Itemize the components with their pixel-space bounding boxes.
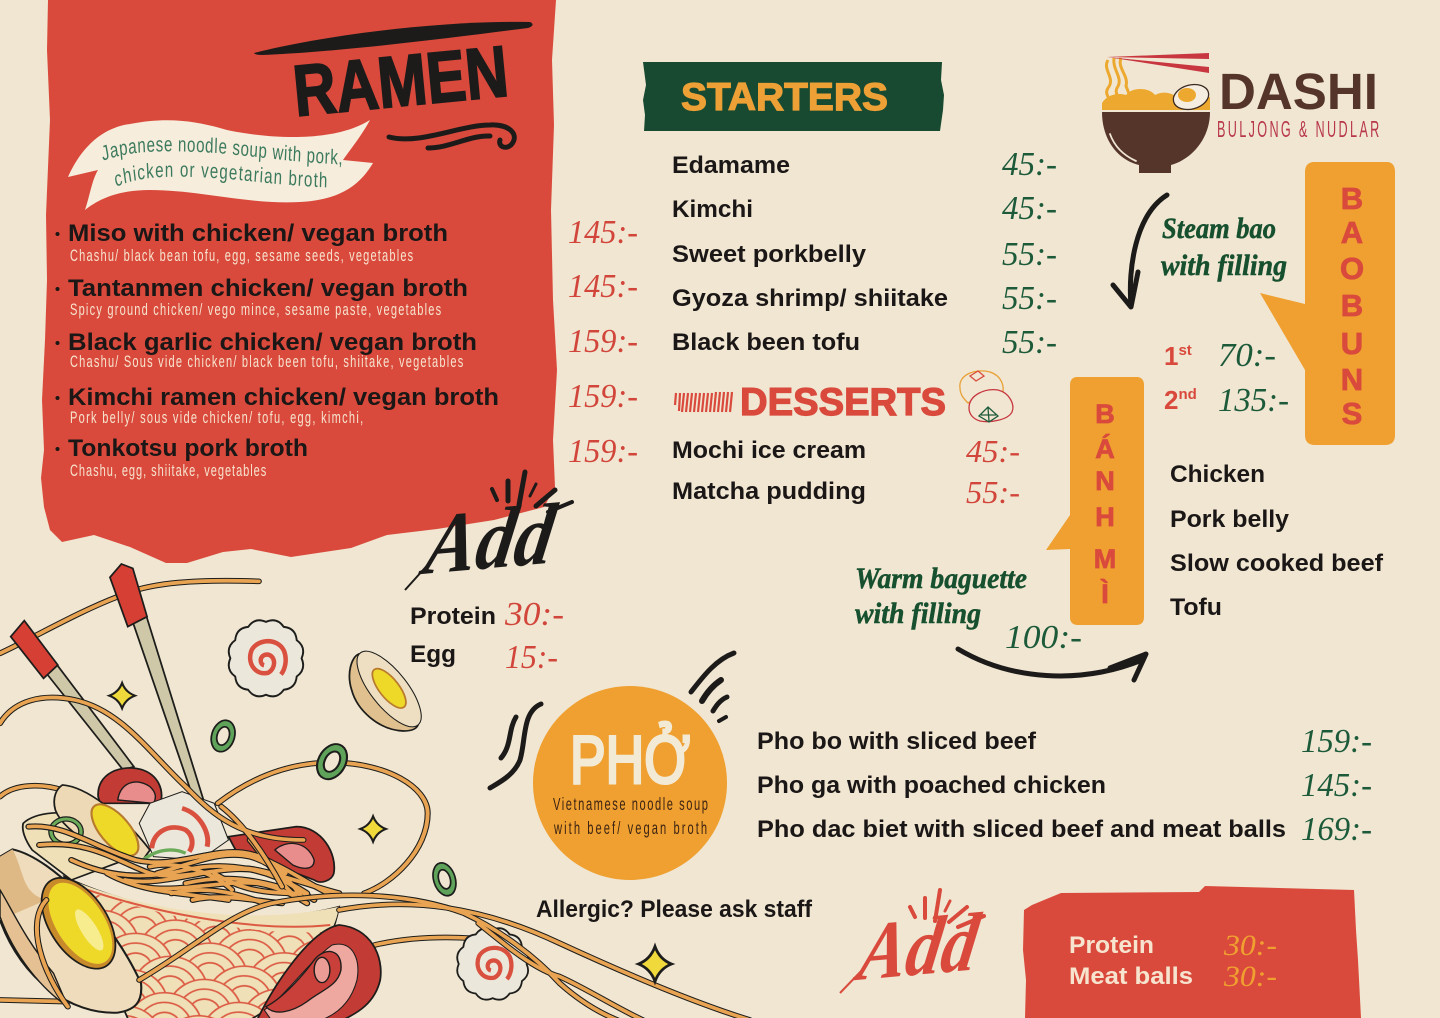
callout: banh mi: M <box>1094 544 1116 574</box>
list: desserts: Mochi ice cream <box>672 437 866 464</box>
list: fillings: Tofu <box>1170 594 1222 621</box>
prices: starters: 55:- <box>1002 324 1057 361</box>
badge: pho: PHỞ <box>570 721 690 798</box>
heading: starters <box>643 62 944 131</box>
list: pho: Pho dac biet with sliced beef and meat balls <box>757 816 1286 843</box>
callout: banh mi: H <box>1095 502 1115 532</box>
panel: pho extras <box>1023 886 1361 1018</box>
prices: ramen <box>568 214 638 470</box>
prices: ramen: 159:- <box>568 323 638 360</box>
list: starters: Gyoza shrimp/ shiitake <box>672 285 948 312</box>
badge: pho: with beef/ vegan broth <box>553 818 707 839</box>
prices: starters: 55:- <box>1002 280 1057 317</box>
callout: bao buns: S <box>1342 396 1362 431</box>
panel: pho extras: 30:- <box>1223 960 1277 993</box>
banner: ramen description: Japanese noodle soup with pork, <box>102 138 342 168</box>
list: starters: Black been tofu <box>672 329 860 356</box>
naruto in bowl <box>139 792 228 860</box>
heading: add (red): Add <box>849 896 986 999</box>
panel: pho extras: Protein <box>1069 932 1154 959</box>
list: ramen items: Chashu/ Sous vide chicken/ black been tofu, shiitake, vegetables <box>70 353 463 372</box>
list: ramen extras <box>410 596 564 676</box>
callout: banh mi <box>1046 377 1144 625</box>
panel: ramen red brush background <box>41 0 557 563</box>
list: ramen extras: 30:- <box>504 596 564 633</box>
green onion rings <box>208 718 460 898</box>
prices: ramen: 159:- <box>568 433 638 470</box>
panel: pho extras: Meat balls <box>1069 963 1193 990</box>
callout: bao buns: B <box>1341 288 1363 323</box>
small egg <box>348 650 422 732</box>
badge: pho <box>533 686 727 880</box>
prices: bao buns <box>1164 337 1289 419</box>
prices: starters: 45:- <box>1002 146 1057 183</box>
list: desserts <box>672 433 1020 510</box>
callout: bao buns: U <box>1341 326 1363 361</box>
list: pho: 145:- <box>1301 767 1372 804</box>
bowl rim back <box>22 812 127 880</box>
callout: banh mi: Á <box>1095 433 1115 464</box>
note: warm baguette <box>855 562 1027 630</box>
prices: bao buns: nd <box>1178 386 1197 403</box>
prices: bao buns: 135:- <box>1218 382 1289 419</box>
logo: dashi <box>1102 53 1379 173</box>
list: pho: Pho bo with sliced beef <box>757 728 1037 755</box>
prices: bao buns: 2 <box>1164 385 1178 415</box>
note: warm baguette: with filling <box>855 597 981 630</box>
list: pho <box>757 723 1372 848</box>
list: starters: Edamame <box>672 152 790 179</box>
long noodles running right <box>139 895 750 1018</box>
list: starters: Sweet porkbelly <box>672 241 867 268</box>
list: desserts: 55:- <box>966 474 1020 510</box>
meat slice top <box>98 768 162 803</box>
meat slice right <box>228 827 334 882</box>
heading: desserts: DESSERTS <box>740 381 946 424</box>
list: fillings: Slow cooked beef <box>1170 550 1384 577</box>
banner: ramen description: chicken or vegetarian broth <box>115 163 326 188</box>
yellow stars <box>109 683 386 842</box>
egg in bowl <box>54 785 150 863</box>
list: pho: 159:- <box>1301 723 1372 760</box>
list: ramen items: Pork belly/ sous vide chicken/ tofu, egg, kimchi, <box>70 409 363 428</box>
bowl front <box>64 877 339 1018</box>
meat slice bottom <box>257 925 381 1018</box>
chopstick left <box>11 621 134 770</box>
price: banh mi: 100:- <box>1005 619 1082 656</box>
callout: banh mi: B <box>1095 399 1115 429</box>
list: fillings: Pork belly <box>1170 506 1290 533</box>
badge: pho: Vietnamese noodle soup <box>553 794 708 815</box>
list: ramen items: Tonkotsu pork broth <box>68 435 308 462</box>
list: pho: Pho ga with poached chicken <box>757 772 1106 799</box>
arrow: banh mi <box>958 649 1146 680</box>
icon: mochi <box>960 371 1013 422</box>
heading: ramen <box>254 22 533 148</box>
list: fillings: Chicken <box>1170 461 1265 488</box>
heading: starters: STARTERS <box>681 76 888 119</box>
prices: starters: 55:- <box>1002 236 1057 273</box>
prices: bao buns: 70:- <box>1218 337 1276 374</box>
prices: ramen: 159:- <box>568 378 638 415</box>
note: steam bao <box>1161 212 1287 282</box>
heading: ramen: RAMEN <box>290 32 512 132</box>
list: desserts: Matcha pudding <box>672 478 866 505</box>
prices: ramen: 145:- <box>568 268 638 305</box>
note: warm baguette: Warm baguette <box>855 562 1027 595</box>
logo: dashi: DASHI <box>1219 63 1378 120</box>
list: ramen items <box>56 220 499 481</box>
list: ramen items: Chashu, egg, shiitake, vegetables <box>70 462 266 481</box>
list: ramen items: Miso with chicken/ vegan broth <box>68 220 448 247</box>
chopstick right <box>110 564 203 800</box>
pho steam strokes <box>490 653 734 788</box>
list: ramen items: Spicy ground chicken/ vego mince, sesame paste, vegetables <box>70 301 441 320</box>
banner: ramen description <box>68 120 373 210</box>
callout: banh mi: Ì <box>1100 578 1109 609</box>
list: ramen extras: Protein <box>410 603 496 630</box>
prices: ramen: 145:- <box>568 214 638 251</box>
list: ramen extras: Egg <box>410 641 456 668</box>
prices: bao buns: 1 <box>1164 341 1178 371</box>
list: ramen items: Black garlic chicken/ vegan broth <box>68 329 477 356</box>
list: fillings <box>1170 461 1384 621</box>
logo: dashi: BULJONG & NUDLAR <box>1217 116 1379 142</box>
list: pho: 169:- <box>1301 811 1372 848</box>
callout: bao buns: N <box>1341 362 1363 397</box>
note: steam bao: with filling <box>1161 249 1287 282</box>
callout: bao buns: B <box>1341 181 1363 216</box>
note: steam bao: Steam bao <box>1162 212 1276 245</box>
prices: bao buns: st <box>1178 342 1192 359</box>
callout: banh mi: N <box>1095 466 1115 496</box>
list: ramen items: Chashu/ black bean tofu, egg, sesame seeds, vegetables <box>70 247 413 266</box>
prices: starters: 45:- <box>1002 190 1057 227</box>
decorative star by noodle end <box>638 947 672 981</box>
illustration: ramen bowl with noodles <box>0 564 750 1018</box>
callout: bao buns: A <box>1341 215 1363 250</box>
green onion in bowl <box>51 819 81 844</box>
list: desserts: 45:- <box>966 433 1020 469</box>
naruto bottom <box>457 928 528 1000</box>
list: ramen items: Tantanmen chicken/ vegan broth <box>68 275 468 302</box>
callout: bao buns <box>1260 162 1395 445</box>
panel: pho extras: 30:- <box>1223 929 1277 962</box>
list: starters: Kimchi <box>672 196 753 223</box>
prices: starters <box>1002 146 1057 361</box>
large egg half <box>0 849 141 1013</box>
list: starters <box>672 152 948 356</box>
note: allergy: Allergic? Please ask staff <box>536 896 813 923</box>
heading: add (black): Add <box>415 485 563 593</box>
list: ramen extras: 15:- <box>505 639 558 676</box>
callout: bao buns: O <box>1340 251 1364 286</box>
list: ramen items: Kimchi ramen chicken/ vegan broth <box>68 384 499 411</box>
arrow: down to bao prices <box>1113 195 1167 307</box>
naruto top <box>229 620 303 696</box>
